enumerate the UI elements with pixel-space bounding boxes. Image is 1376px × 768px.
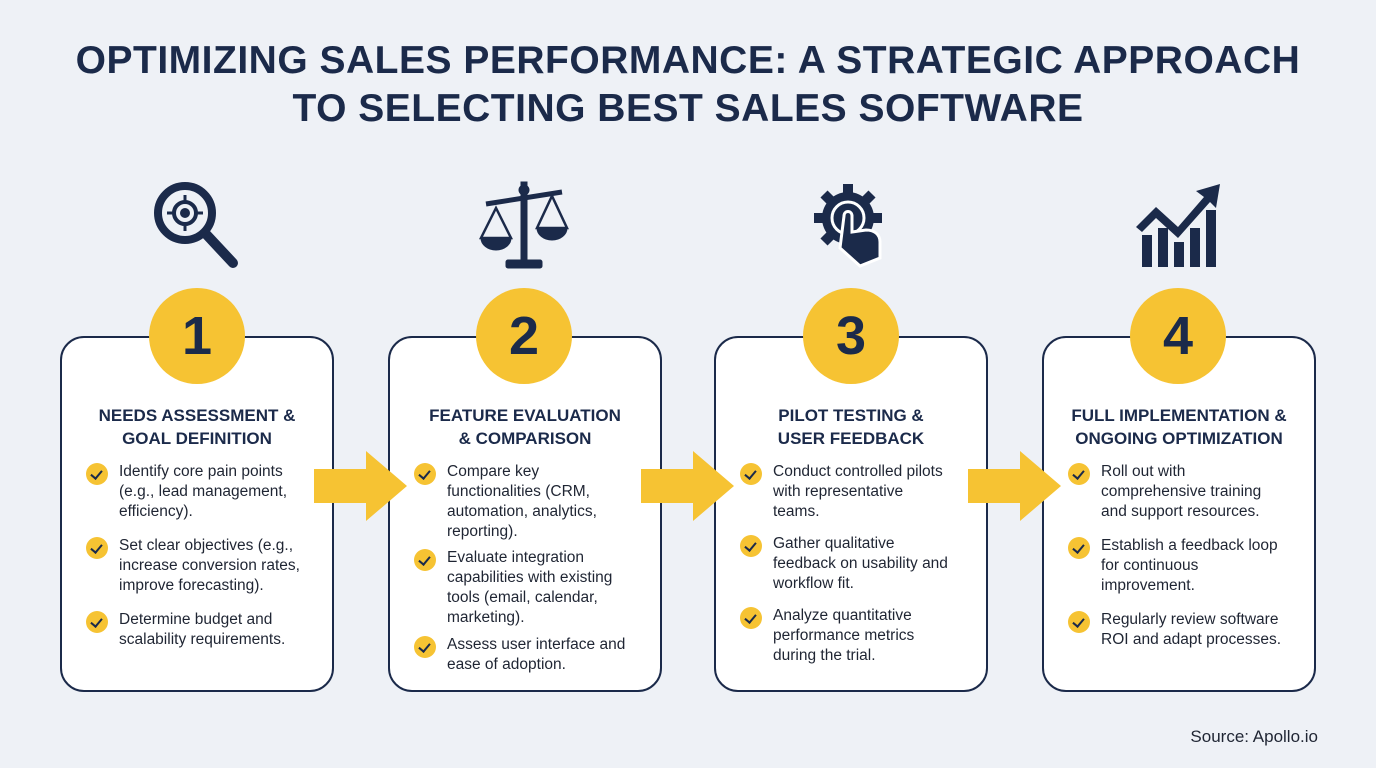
bullets: Determine budget and scalability requirements. [119,611,285,648]
bullets: Identify core pain points (e.g., lead management, efficiency). [119,463,287,520]
bullets: Regularly review software ROI and adapt processes. [1101,611,1281,648]
number 4 [1130,288,1226,384]
heading [1071,406,1287,448]
bullets [740,463,948,664]
heading: USER FEEDBACK [778,429,924,448]
bullets: workflow fit. [773,575,854,592]
bullets: Assess user interface and ease of adoption. [447,636,625,673]
bullets: Analyze quantitative [773,607,912,624]
bullets: Establish a feedback loop for continuous improvement. [1101,537,1278,594]
card 3 [714,336,988,692]
heading: FEATURE EVALUATION [429,406,621,425]
arrow 2 [641,451,734,521]
title: TO SELECTING BEST SALES SOFTWARE [292,87,1084,130]
bullets: performance metrics [773,627,914,644]
bullets: Gather qualitative [773,535,894,552]
icon: growth chart [1136,184,1220,267]
bullets: Compare key functionalities (CRM, automation, analytics, reporting). [447,463,597,540]
arrow 3 [968,451,1061,521]
bullets [86,463,300,648]
arrow 1 [314,451,407,521]
bullets: teams. [773,503,820,520]
icon: gear with hand [814,184,882,268]
bullets: with representative [773,483,903,500]
icon: scales [479,182,569,268]
heading: NEEDS ASSESSMENT & [99,406,295,425]
heading: PILOT TESTING & [778,406,924,425]
bullets: during the trial. [773,647,876,664]
card 4 [1042,336,1316,692]
number 2: 2 [509,306,539,366]
number 3: 3 [836,306,866,366]
number 1: 1 [182,306,212,366]
heading: FULL IMPLEMENTATION & [1071,406,1287,425]
bullets: Set clear objectives (e.g., increase conversion rates, improve forecasting). [119,537,300,594]
card 2 [388,336,662,692]
bullets [414,463,625,673]
number 1 [149,288,245,384]
bullets: feedback on usability and [773,555,948,572]
heading [778,406,924,448]
card 1 [60,336,334,692]
heading: ONGOING OPTIMIZATION [1075,429,1283,448]
heading [429,406,621,448]
bullets: Evaluate integration capabilities with existing tools (email, calendar, marketing). [447,549,612,626]
title [76,39,1300,130]
bullets: Roll out with comprehensive training and support resources. [1101,463,1261,520]
heading [99,406,295,448]
heading: & COMPARISON [459,429,591,448]
number 3 [803,288,899,384]
number 2 [476,288,572,384]
source: Source: Apollo.io [1190,727,1318,746]
bullets: Conduct controlled pilots [773,463,943,480]
icon: magnifier target [154,182,238,268]
heading: GOAL DEFINITION [122,429,272,448]
number 4: 4 [1163,306,1193,366]
bullets [1068,463,1281,648]
title: OPTIMIZING SALES PERFORMANCE: A STRATEGIC APPROACH [76,39,1300,82]
